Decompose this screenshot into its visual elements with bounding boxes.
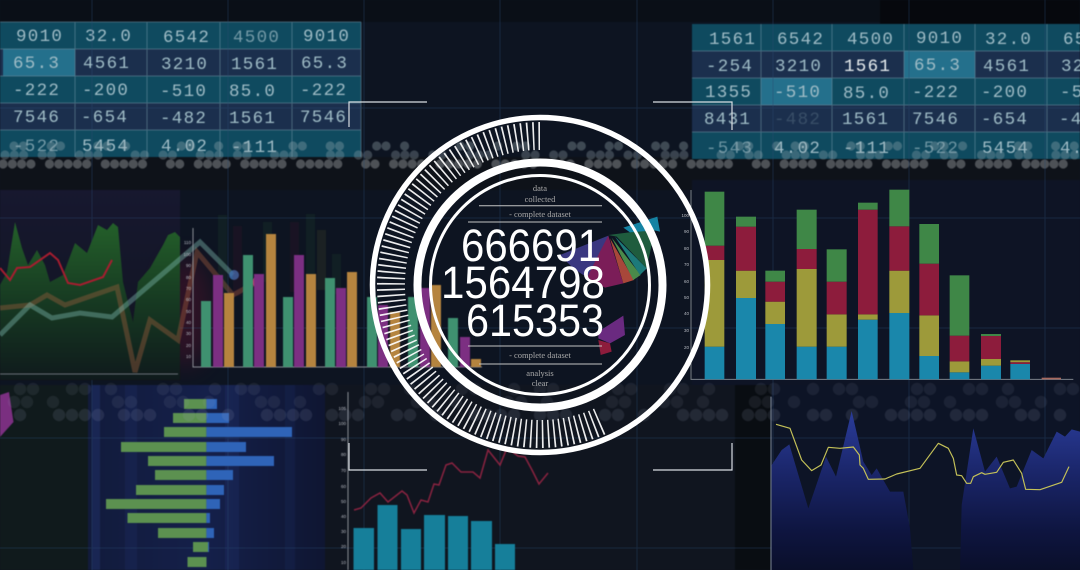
- stacked chart axis labels: 20: [684, 345, 689, 350]
- right data table: 1561: [709, 30, 756, 50]
- left data table: 32.0: [85, 27, 132, 47]
- bottom teal bar and line chart: 90: [341, 437, 346, 442]
- stacked bar chart: [691, 190, 1073, 379]
- right data table: -222: [912, 83, 959, 103]
- column chart: green, purple, orange: 50: [186, 309, 191, 314]
- bottom teal bar and line chart: 60: [341, 484, 346, 489]
- left data table: -222: [300, 81, 347, 101]
- right data table: -543: [706, 139, 753, 159]
- right data table: 3210: [775, 57, 822, 77]
- bottom teal bar and line chart: 40: [341, 514, 346, 519]
- right data table: 5454: [982, 139, 1029, 159]
- left data table: 3210: [161, 55, 208, 75]
- bottom captions: analysis: [526, 368, 554, 378]
- left data table: -510: [160, 82, 207, 102]
- yellow line series: [776, 424, 1069, 490]
- left data table: -111: [231, 138, 278, 158]
- top captions: data: [533, 183, 547, 193]
- left data table: -222: [13, 81, 60, 101]
- stacked chart axis labels: [681, 213, 689, 350]
- outer ring: [372, 118, 708, 452]
- green area series: [0, 222, 180, 380]
- top captions: - complete dataset: [509, 209, 572, 219]
- left data table: 4.02: [161, 137, 208, 157]
- left data table: -654: [81, 108, 128, 128]
- left data table: 9010: [16, 27, 63, 47]
- right data table: 7546: [912, 110, 959, 130]
- orange line series: [0, 252, 257, 372]
- right data table: -510: [774, 83, 821, 103]
- left data table: 1561: [229, 109, 276, 129]
- right data table: -111: [843, 139, 890, 159]
- right data table: 1561: [842, 110, 889, 130]
- corner brackets: [349, 102, 732, 470]
- left data table: 6542: [163, 28, 210, 48]
- bottom teal bar and line chart: 50: [341, 499, 346, 504]
- left data table: 7546: [13, 108, 60, 128]
- blue marker: [229, 270, 239, 280]
- right data table: 9010: [916, 29, 963, 49]
- top captions: [468, 183, 602, 222]
- right data table: -522: [912, 139, 959, 159]
- stacked chart axis labels: 40: [684, 311, 689, 316]
- right data table: 4500: [847, 30, 894, 50]
- left data table: 4561: [83, 54, 130, 74]
- stacked chart axis labels: 50: [684, 295, 689, 300]
- bottom teal bar and line chart: 80: [341, 452, 346, 457]
- pie chart behind dial: [560, 217, 660, 355]
- column chart: green, purple, orange: 110: [184, 240, 191, 245]
- bottom teal bar and line chart: 30: [341, 529, 346, 534]
- left data table: -522: [13, 137, 60, 157]
- bottom right blue area and line chart: [771, 397, 1080, 570]
- stacked chart axis labels: 70: [684, 262, 689, 267]
- column chart: green, purple, orange: 90: [186, 263, 191, 268]
- x axis: [0, 373, 178, 375]
- right data table: 6542: [777, 30, 824, 50]
- right data table: 8431: [704, 110, 751, 130]
- left data table: 5454: [82, 137, 129, 157]
- top captions: collected: [525, 194, 556, 204]
- pink marker: [252, 278, 260, 286]
- left data table: 65.3: [13, 54, 60, 74]
- inner thin ring: [430, 176, 650, 394]
- stacked chart axis labels: 80: [684, 246, 689, 251]
- bottom teal bar and line chart: 70: [341, 468, 346, 473]
- blue area series: [772, 411, 1080, 570]
- bottom teal bar and line chart: 100: [338, 421, 346, 426]
- column chart: green, purple, orange: 80: [186, 275, 191, 280]
- column chart: green, purple, orange: 70: [186, 286, 191, 291]
- right data table: 1561: [844, 57, 891, 77]
- bottom teal bar and line chart: 105: [338, 406, 346, 411]
- value 1564798: 1564798: [441, 257, 605, 308]
- right data table: -254: [706, 57, 753, 77]
- right data table: 85.0: [843, 84, 890, 104]
- dot band: lower: [14, 389, 1080, 415]
- stacked chart axis labels: 30: [684, 328, 689, 333]
- right data table: [692, 24, 1080, 159]
- left data table: [0, 22, 361, 158]
- stacked chart axis labels: 60: [684, 279, 689, 284]
- left data table: 9010: [303, 27, 350, 47]
- left area and line chart: [0, 222, 260, 380]
- left data table: 4500: [233, 28, 280, 48]
- left data table: -200: [82, 81, 129, 101]
- value 615353: 615353: [466, 295, 604, 346]
- column chart: green, purple, orange: [183, 214, 482, 367]
- column chart: green, purple, orange: 40: [186, 320, 191, 325]
- value 666691: 666691: [461, 220, 601, 271]
- inner thick ring: [418, 162, 662, 408]
- purple fragment: [0, 392, 14, 437]
- column chart: green, purple, orange: 30: [186, 331, 191, 336]
- stacked chart axis labels: 90: [684, 229, 689, 234]
- column chart: green, purple, orange: 10: [186, 354, 191, 359]
- column chart: green, purple, orange: 100: [183, 252, 191, 257]
- bottom captions: [468, 346, 602, 388]
- right data table: -482: [774, 110, 821, 130]
- bottom captions: clear: [532, 378, 548, 388]
- left data table: 1561: [231, 55, 278, 75]
- bottom teal bar and line chart: [338, 392, 548, 570]
- right data table: 1355: [705, 83, 752, 103]
- red line series: [0, 253, 112, 285]
- teal line series: [0, 242, 233, 335]
- column chart: green, purple, orange: 20: [186, 343, 191, 348]
- left data table: 85.0: [229, 82, 276, 102]
- left data table: 65.3: [301, 54, 348, 74]
- right data table: 4561: [983, 57, 1030, 77]
- column chart: green, purple, orange: 60: [186, 297, 191, 302]
- right data table: -200: [981, 83, 1028, 103]
- bottom captions: - complete dataset: [509, 350, 572, 360]
- stacked chart axis labels: 100: [681, 213, 689, 218]
- right data table: 4.02: [774, 139, 821, 159]
- horizontal diverging bar chart: [0, 392, 292, 567]
- left data table: -482: [160, 109, 207, 129]
- dot band: upper: [3, 146, 1080, 164]
- right data table: -654: [981, 110, 1028, 130]
- right data table: 32.0: [985, 30, 1032, 50]
- circular dial: [372, 118, 708, 452]
- right data table: 65.3: [914, 56, 961, 76]
- tick arc: [391, 136, 603, 434]
- left data table: 7546: [300, 108, 347, 128]
- bottom teal bar and line chart: 10: [341, 560, 346, 565]
- bottom teal bar and line chart: 20: [341, 544, 346, 549]
